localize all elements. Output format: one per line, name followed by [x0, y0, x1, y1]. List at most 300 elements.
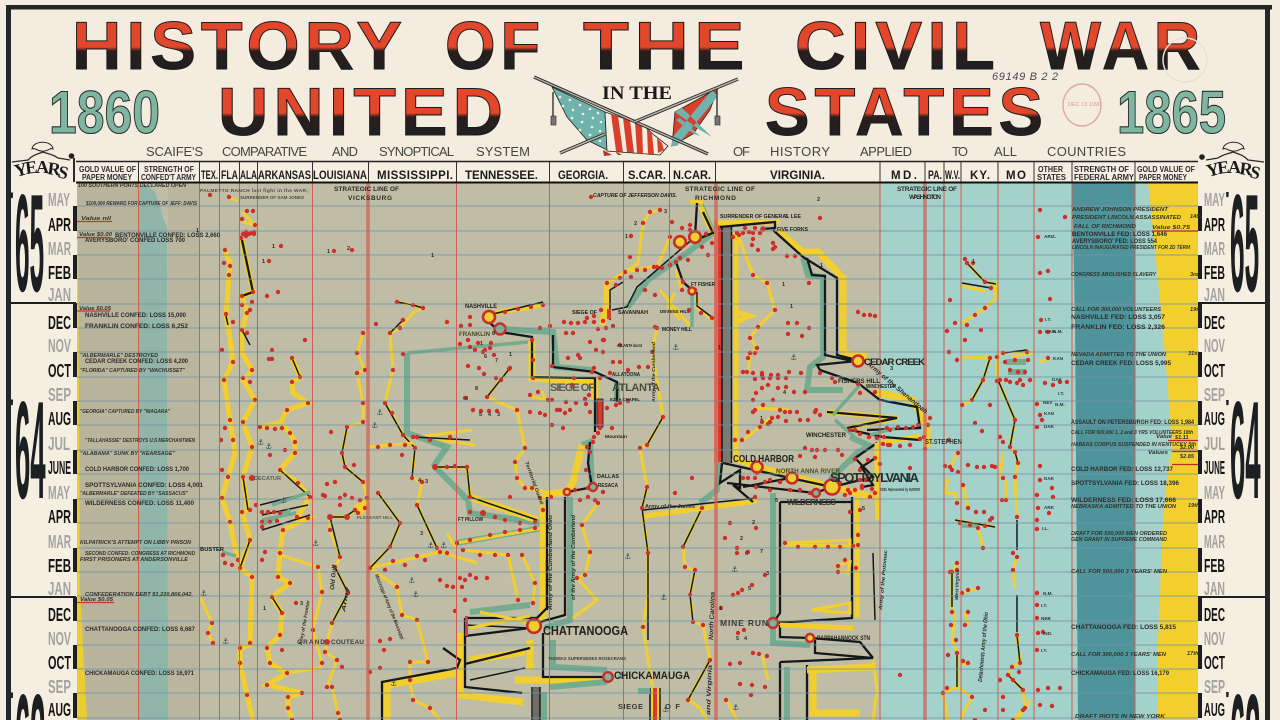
numerals beside markers: 7 — [495, 358, 498, 364]
anchors for naval actions: ⚓ — [617, 671, 624, 680]
numerals beside markers: 6 — [745, 551, 748, 557]
year numerals right: ' — [1225, 689, 1230, 711]
month labels left: FEB — [48, 263, 71, 283]
header row of states: TENNESSEE. — [465, 170, 538, 182]
month labels right: DEC — [1204, 605, 1225, 625]
anchors for naval actions: ⚓ — [624, 552, 631, 561]
rotated army names: Army of the Frontier — [298, 599, 312, 646]
right chronology text: LINCOLN INAUGURATED PRESIDENT FOR 2D TERM — [1072, 245, 1190, 251]
year numerals left: ' — [9, 395, 14, 420]
battle names: WILDERNESS — [787, 497, 836, 507]
year 1860: 1860 — [49, 79, 160, 146]
battle names: ST.STEPHEN — [925, 439, 962, 446]
numerals beside markers: 8 — [475, 386, 478, 392]
right chronology text: CALL FOR 300,000 VOLUNTEERS — [1071, 307, 1161, 313]
anchors for naval actions: ⚓ — [408, 576, 415, 585]
right chronology text: $1.11 — [1174, 435, 1189, 441]
numerals beside markers: 2 — [817, 197, 820, 203]
subtitle: COMPARATIVE — [222, 144, 307, 159]
numerals beside markers: 1 — [327, 249, 330, 255]
left chronology text: COLD HARBOR CONFED: LOSS 1,700 — [85, 466, 190, 473]
subtitle: TO — [952, 144, 968, 159]
numerals beside markers: 3 — [890, 366, 893, 372]
anchors for naval actions: ⚓ — [732, 703, 739, 712]
left chronology text: WILDERNESS CONFED: LOSS 11,400 — [85, 500, 195, 507]
month labels right: NOV — [1204, 336, 1225, 356]
left chronology text: CEDAR CREEK CONFED: LOSS 4,200 — [85, 358, 189, 365]
anchors for naval actions: ⚓ — [222, 637, 229, 646]
rotated army names — [298, 341, 990, 715]
anchors for naval actions: ⚓ — [440, 541, 447, 550]
month labels right: SEP — [1204, 385, 1225, 405]
icon: left ornament — [12, 142, 74, 182]
month labels left: SEP — [48, 385, 71, 405]
army routes: virginia — [643, 202, 927, 720]
battle names: BUSTER — [200, 547, 224, 553]
header row of states: GOLD VALUE OF — [79, 165, 136, 174]
header row of states: FLA — [221, 170, 238, 182]
library marks: 69149 B 2 2 — [992, 71, 1058, 83]
header row of states: STRENGTH OF — [144, 165, 194, 174]
header row of states: TEX. — [201, 170, 218, 182]
state codes in other states column: ARIZ. — [1044, 234, 1056, 239]
left chronology text: FRANKLIN CONFED: LOSS 6,252 — [85, 323, 189, 330]
battle names: SURRENDER OF SAM JONES — [240, 195, 304, 200]
rotated army names: Army of the Shenandoah — [865, 361, 928, 415]
strategic line labels: STRATEGIC LINE OF — [897, 186, 957, 193]
battle names — [200, 188, 962, 711]
right chronology text: NASHVILLE FED: LOSS 3,057 — [1071, 314, 1166, 321]
numerals beside markers: 1 — [509, 352, 512, 358]
left chronology text: Value $0.05 — [80, 597, 114, 603]
month labels right: JUL — [1204, 434, 1225, 454]
chart: confederate army strength — [139, 186, 168, 720]
right chronology text: AVERYSBORO' FED: LOSS 554 — [1072, 238, 1158, 245]
left chronology text: BENTONVILLE CONFED: LOSS 2,660 — [115, 232, 221, 239]
state codes in other states column: N.M. — [1055, 402, 1065, 407]
title: THE — [583, 8, 750, 84]
month labels left: AUG — [48, 700, 71, 720]
header row of states: LOUISIANA — [313, 170, 367, 182]
state column rules — [138, 182, 1135, 720]
battle names: SPOTTSYLVANIA — [830, 470, 920, 485]
battle names: OF — [665, 702, 680, 711]
in the: IN THE — [602, 83, 672, 104]
month labels left: JAN — [48, 579, 71, 599]
state codes in other states column: DAK — [1044, 476, 1055, 481]
battle names: FISHERS HILL — [838, 378, 880, 385]
battle markers — [208, 195, 1067, 720]
subtitle: HISTORY — [770, 144, 830, 159]
numerals beside markers: 1 — [782, 282, 785, 288]
battle names: RESACA — [598, 483, 618, 489]
numerals beside markers: 1 — [760, 416, 763, 422]
right chronology text: CEDAR CREEK FED: LOSS 5,995 — [1071, 360, 1172, 367]
header row of states: MD. — [891, 170, 917, 182]
state codes in other states column: DAK — [1052, 377, 1063, 382]
left chronology text: CHATTANOOGA CONFED: LOSS 6,687 — [85, 626, 196, 633]
numerals beside markers: 2 — [740, 536, 743, 542]
right chronology text: PRESIDENT LINCOLN ASSASSINATED — [1072, 215, 1181, 221]
left chronology text: KILPATRICK'S ATTEMPT ON LIBBY PRISON — [80, 540, 192, 546]
numerals beside markers: 1 — [625, 234, 628, 240]
state codes in other states column: I.T. — [1041, 648, 1047, 653]
battle names: DALLAS — [597, 474, 619, 480]
anchors for naval actions: ⚓ — [265, 442, 272, 451]
right chronology text: $2.85 — [1179, 454, 1195, 460]
month labels left — [48, 190, 71, 720]
header row of states: KY. — [970, 170, 990, 182]
numerals beside markers: 4 — [418, 478, 422, 484]
anchors for naval actions: ⚓ — [376, 408, 383, 417]
battle names: COUTEAU — [331, 639, 364, 646]
anchors for naval actions: ⚓ — [662, 705, 669, 714]
left chronology text: FIRST PRISONERS AT ANDERSONVILLE — [80, 557, 188, 563]
side panel: right years — [1198, 163, 1265, 720]
battle names: GRAND — [297, 639, 325, 646]
battle names: CEDAR CREEK — [864, 357, 925, 368]
state codes in other states column: NEV — [1043, 400, 1053, 405]
numerals beside markers: 7 — [760, 549, 763, 555]
header row of states: FEDERAL ARMY — [1074, 173, 1135, 182]
battle names: CHATTANOOGA — [543, 623, 629, 638]
numerals beside markers: 3 — [664, 209, 667, 215]
right chronology text: Values — [1148, 450, 1168, 456]
anchors for naval actions: ⚓ — [731, 565, 738, 574]
anchors for naval actions: ⚓ — [672, 343, 679, 352]
battle names: EZRA CHAPEL — [610, 397, 640, 402]
numerals beside markers: 3 — [425, 479, 428, 485]
subtitle: OF — [733, 144, 750, 159]
month labels right: NOV — [1204, 629, 1225, 649]
numerals beside markers: 4 — [465, 396, 469, 402]
header row of states: VIRGINIA. — [770, 170, 825, 182]
month labels right: MAY — [1204, 190, 1225, 210]
right chronology text: 17th — [1187, 651, 1199, 657]
numerals beside markers: 1 — [972, 259, 975, 265]
rotated army names: and Virginia — [706, 664, 714, 715]
strategic line labels: RICHMOND — [695, 195, 736, 202]
month labels left: NOV — [48, 629, 71, 649]
state codes in other states column: KAN — [1053, 356, 1064, 361]
rotated army names: Army of the Cumberland — [651, 341, 657, 403]
battle names: PALMETTO RANCH last fight in the WAR; — [200, 188, 308, 194]
battle names: SAVANNAH — [618, 310, 648, 316]
state codes in other states column: KAN — [1044, 411, 1055, 416]
anchors for naval actions: ⚓ — [660, 593, 667, 602]
numerals beside markers: 2 — [752, 520, 755, 526]
left chronology text: SECOND CONFED: CONGRESS AT RICHMOND — [85, 551, 195, 557]
battle names: MONEY HILL — [662, 327, 692, 333]
year numerals left: 64 — [15, 373, 46, 529]
left chronology text: "TALLAHASSIE" DESTROYS U.S MERCHANTMEN — [85, 438, 196, 444]
month labels right: OCT — [1204, 361, 1225, 381]
header row of states: MO — [1006, 170, 1026, 182]
rotated army names: of the Army of the Cumberland — [571, 514, 577, 600]
numerals beside markers: 1 — [263, 606, 266, 612]
battle names: Mountain — [605, 434, 627, 439]
year numerals right: 65 — [1230, 166, 1259, 322]
month labels left: DEC — [48, 605, 71, 625]
state codes in other states column: N.M. — [1043, 591, 1053, 596]
state codes in other states column: I.T. — [1058, 391, 1064, 396]
anchors for naval actions: ⚓ — [371, 421, 378, 430]
header row of states: OTHER — [1038, 165, 1063, 174]
month grid lines — [77, 206, 1198, 718]
right chronology text: 19th — [1190, 307, 1202, 313]
strategic line labels: WASHINGTON — [909, 194, 941, 201]
numerals beside markers: 1 — [718, 345, 721, 351]
month labels left: APR — [48, 507, 71, 527]
state codes in other states column: I.T. — [1045, 317, 1051, 322]
month labels right: MAY — [1204, 483, 1225, 503]
left chronology text: "ALBERMARLE" DESTROYED — [80, 353, 158, 359]
state codes in other states column: ARK — [1044, 505, 1055, 510]
state codes in other states column: KAN. — [1045, 329, 1056, 334]
battle names: FT PILLOW — [458, 517, 484, 523]
rotated army names: North Carolina — [708, 591, 717, 640]
month labels left: MAR — [48, 532, 71, 552]
subtitle: SYSTEM — [476, 144, 530, 159]
anchors for naval actions: ⚓ — [790, 353, 797, 362]
numerals beside markers: 1 — [196, 228, 199, 234]
left chronology text: "ALBERMARLE" DEFEATED BY "SASSACUS" — [80, 491, 188, 497]
rotated army names: Old Gulf — [330, 564, 338, 590]
state codes in other states column: I.L. — [1042, 526, 1049, 531]
text: JUNE — [48, 458, 71, 478]
right chronology text: SPOTTSYLVANIA FED: LOSS 18,396 — [1071, 480, 1180, 487]
numerals beside markers: 4 — [783, 390, 787, 396]
anchors for naval actions: ⚓ — [200, 589, 207, 598]
numerals beside markers: 6 — [484, 354, 487, 360]
month labels left: OCT — [48, 361, 71, 381]
month labels right: SEP — [1204, 677, 1225, 697]
month labels right: JAN — [1204, 285, 1225, 305]
month labels right: MAR — [1204, 239, 1225, 259]
header row of states: GEORGIA. — [558, 170, 608, 182]
title — [72, 8, 1205, 84]
year numerals left: ' — [9, 188, 14, 213]
strategic line labels: VICKSBURG — [348, 195, 392, 202]
numerals beside markers: 1 — [262, 259, 265, 265]
numerals beside markers: 5 — [479, 412, 482, 418]
right chronology text: ANDREW JOHNSON PRESIDENT — [1071, 207, 1169, 213]
battle names: ALLATOONA — [612, 372, 640, 378]
state codes in other states column: IND. — [1043, 631, 1052, 636]
numerals beside markers: 2 — [634, 221, 637, 227]
month labels left: MAY — [48, 190, 70, 210]
battle names: FRANKLIN — [459, 331, 490, 338]
years label right: YEARS — [1204, 157, 1263, 183]
battle names: CHICKAMAUGA — [614, 670, 690, 682]
state codes in other states column: I.T. — [1041, 603, 1047, 608]
army routes: west — [200, 197, 528, 720]
numerals beside markers: 2 — [347, 246, 350, 252]
subtitle: SYNOPTICAL — [379, 144, 454, 159]
left chronology text: SPOTTSYLVANIA CONFED: LOSS 4,001 — [85, 482, 204, 489]
right chronology text: NEVADA ADMITTED TO THE UNION — [1071, 352, 1167, 358]
rotated army names: Army of the Cumberland Ohio — [548, 514, 554, 611]
subtitle: APPLIED — [860, 144, 912, 159]
header row of states: PA. — [928, 170, 942, 182]
battle names: FIVE FORKS — [777, 227, 808, 233]
subtitle: COUNTRIES — [1047, 144, 1126, 159]
month labels left: DEC — [48, 313, 71, 333]
labelled battle circles — [249, 226, 864, 682]
right chronology text: DRAFT RIOTS IN NEW YORK — [1075, 714, 1166, 720]
title: HISTORY — [72, 8, 407, 84]
year numerals right: 64 — [1230, 373, 1261, 529]
right chronology text: 3rd — [1190, 272, 1199, 278]
right chronology text: $2.00 — [1179, 445, 1195, 451]
right chronology text: 19th — [1188, 503, 1200, 509]
numerals beside markers: 1 — [480, 341, 483, 347]
title line two — [218, 74, 1048, 150]
header row of states: PAPER MONEY — [82, 173, 133, 182]
numerals beside markers: 5 — [748, 586, 751, 592]
battle names: SIEGE OF — [572, 310, 598, 316]
strategic line labels — [334, 186, 957, 202]
header row of states: PAPER MONEY — [1139, 173, 1188, 182]
battle names: SIEGE OF — [550, 382, 595, 394]
title: WAR — [1040, 8, 1205, 84]
header row of states: CONFED'T ARMY — [141, 173, 197, 182]
month labels right: OCT — [1204, 653, 1225, 673]
map background — [77, 182, 1198, 720]
title line two: UNITED — [218, 74, 508, 150]
left chronology text: "FLORIDA" CAPTURED BY "WACHUSSET" — [80, 368, 185, 374]
year numerals left — [9, 166, 46, 720]
left chronology text: CONFEDERATION DEBT $1,220,866,042. — [85, 592, 193, 598]
left chronology text: "GEORGIA" CAPTURED BY "NIAGARA" — [80, 409, 170, 415]
month labels right — [1204, 190, 1225, 720]
battle names: WINCHESTER — [866, 384, 896, 390]
month labels left: AUG — [48, 409, 71, 429]
strategic line labels: STRATEGIC LINE OF — [334, 186, 399, 193]
header row of states: ARKANSAS — [258, 170, 311, 182]
chart: gold value left — [76, 240, 87, 720]
battle names: RAPPAHANNOCK STN — [817, 636, 870, 642]
month labels left: APR — [48, 215, 71, 235]
rotated army names: Army of the Potomac — [878, 550, 889, 611]
title: CIVIL — [795, 8, 1000, 84]
anchors for naval actions — [200, 343, 797, 714]
right chronology text: CONGRESS ABOLISHED SLAVERY — [1071, 272, 1157, 278]
left chronology text: Value $0.00 — [79, 232, 113, 238]
battle names: THOMAS SUPERSEDES ROSECRANS — [548, 656, 627, 662]
numerals beside markers: 5 — [775, 498, 778, 504]
left chronology text: "ALABAMA" SUNK BY "KEARSAGE" — [80, 451, 175, 457]
right chronology text: DRAFT FOR 500,000 MEN ORDERED — [1071, 531, 1167, 537]
month labels right: AUG — [1204, 409, 1225, 429]
right chronology text: GEN GRANT IN SUPREME COMMAND — [1071, 537, 1167, 543]
right chronology text: CALL FOR 500,000 3 YEARS' MEN — [1071, 569, 1168, 575]
numerals beside markers: 3 — [785, 214, 788, 220]
right chronology text: CALL FOR 300,000 3 YEARS' MEN — [1071, 652, 1167, 658]
right chronology text: 31st — [1188, 351, 1200, 357]
header row of states — [76, 162, 1198, 182]
army routes: east of the strategic line — [943, 263, 1050, 720]
battle names: NASHVILLE — [465, 303, 498, 310]
right chronology text: CHICKAMAUGA FED: LOSS 16,179 — [1071, 670, 1170, 677]
state codes in other states column — [1041, 234, 1065, 653]
rotated army names: Army — [341, 585, 352, 614]
left chronology text — [77, 183, 221, 677]
title line two: STATES — [765, 74, 1048, 150]
battle names: SOEL Represented by HUNTER — [880, 487, 920, 493]
title: OF — [445, 8, 545, 84]
month labels left: MAY — [48, 483, 70, 503]
right chronology text: HABEAS CORPUS SUSPENDED IN KENTUCKY 5th — [1071, 442, 1197, 448]
left chronology text: 100 SOUTHERN PORTS DECLARED OPEN — [78, 183, 187, 189]
numerals beside markers: 4 — [744, 636, 748, 642]
year numerals left: ' — [9, 688, 14, 713]
year 1865: 1865 — [1117, 79, 1226, 146]
anchors for naval actions: ⚓ — [312, 539, 319, 548]
text: JUNE — [1204, 458, 1225, 478]
battle names: COLD HARBOR — [733, 454, 795, 465]
battle names: WINCHESTER — [806, 432, 846, 439]
chart: gold value right — [1148, 182, 1198, 720]
numerals beside markers: 3 — [497, 412, 500, 418]
header row of states: W.V. — [945, 170, 960, 182]
right chronology text: WILDERNESS FED: LOSS 17,666 — [1071, 497, 1177, 504]
month labels right: APR — [1204, 215, 1225, 235]
month labels right: FEB — [1204, 263, 1225, 283]
battle names: Army of the James — [645, 504, 695, 510]
right chronology text: FRANKLIN FED: LOSS 2,326 — [1071, 324, 1166, 331]
right chronology text: 14th — [1190, 214, 1202, 220]
header row of states: STRENGTH OF — [1074, 165, 1129, 174]
rotated army names: West Virginia — [954, 570, 961, 600]
rotated army names: Territorial Guard — [523, 461, 545, 506]
left chronology text: Value $0.05 — [79, 306, 112, 312]
library marks — [992, 38, 1207, 126]
header row of states: STATES — [1037, 173, 1067, 182]
month labels left: SEP — [48, 677, 71, 697]
numerals beside markers: 1 — [790, 304, 793, 310]
header row of states: N.CAR. — [673, 170, 711, 182]
subtitle: ALL — [994, 144, 1017, 159]
year numerals right — [1225, 166, 1261, 720]
right chronology text: NEBRASKA ADMITTED TO THE UNION — [1071, 504, 1177, 510]
right chronology text: Value — [1156, 434, 1172, 440]
battle names: FT FISHER — [691, 282, 715, 288]
side panel: left years — [11, 163, 77, 720]
month labels left: FEB — [48, 556, 71, 576]
numerals beside markers — [196, 197, 975, 642]
subtitle: SCAIFE'S — [146, 144, 203, 159]
numerals beside markers: 1 — [719, 606, 722, 612]
month labels right: AUG — [1204, 700, 1225, 720]
battle names: SURRENDER OF GENERAL LEE — [720, 214, 801, 220]
header row of states: ALA — [240, 170, 257, 182]
numerals beside markers: 1 — [272, 244, 275, 250]
header row of states: MISSISSIPPI. — [377, 170, 453, 182]
years label left: YEARS — [12, 157, 71, 183]
month labels left: JUL — [48, 434, 70, 454]
icon: right ornament — [1199, 142, 1264, 162]
year numerals right: ' — [1225, 189, 1230, 211]
month labels left: NOV — [48, 336, 71, 356]
battle names: DEVENS HILL — [660, 309, 690, 315]
right chronology text: CHATTANOOGA FED: LOSS 5,815 — [1071, 624, 1177, 631]
right chronology text: Value $0.75 — [1152, 225, 1191, 231]
battle names: PLEASANT HILL — [357, 515, 393, 521]
numerals beside markers: 3 — [766, 571, 769, 577]
left chronology text: CHICKAMAUGA CONFED: LOSS 16,971 — [85, 670, 195, 677]
battle names: SIEGE — [618, 702, 643, 711]
